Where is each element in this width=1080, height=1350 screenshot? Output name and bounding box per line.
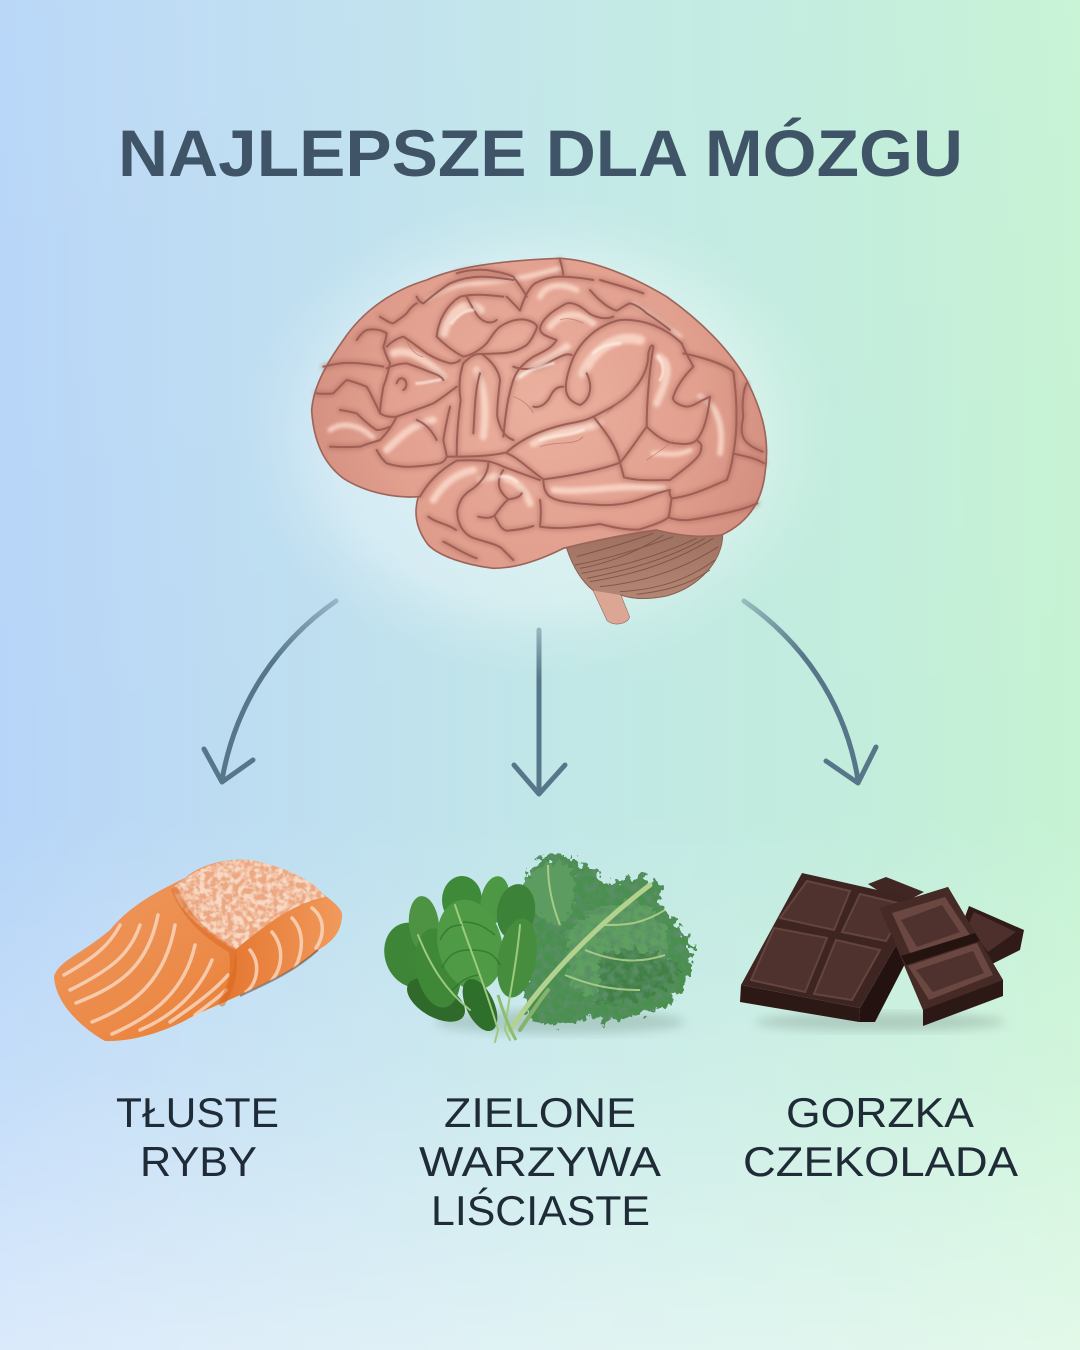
label: leafy greens: WARZYWA	[419, 1138, 661, 1185]
label: leafy greens: LIŚCIASTE	[431, 1186, 650, 1234]
label: dark chocolate	[743, 1089, 1018, 1185]
icon: brain illustration	[312, 258, 767, 624]
arrow: brain to dark chocolate	[744, 601, 876, 783]
title: NAJLEPSZE DLA MÓZGU	[118, 116, 963, 190]
label: fatty fish: TŁUSTE	[116, 1089, 279, 1136]
arrow: brain to leafy greens	[514, 630, 565, 794]
highlights on gyri	[330, 268, 721, 503]
label: fatty fish	[116, 1089, 279, 1185]
label: dark chocolate: CZEKOLADA	[743, 1138, 1018, 1185]
arrow: brain to fatty fish	[204, 601, 336, 782]
label: leafy greens	[419, 1089, 661, 1234]
icon: salmon fillet	[54, 860, 342, 1041]
label: leafy greens: ZIELONE	[444, 1089, 636, 1136]
kale	[510, 855, 692, 1030]
spinach leaves	[375, 874, 543, 1042]
icon: leafy greens	[375, 855, 692, 1042]
label: dark chocolate: GORZKA	[786, 1089, 974, 1136]
icon: dark chocolate	[740, 873, 1024, 1031]
label: fatty fish: RYBY	[140, 1138, 257, 1185]
